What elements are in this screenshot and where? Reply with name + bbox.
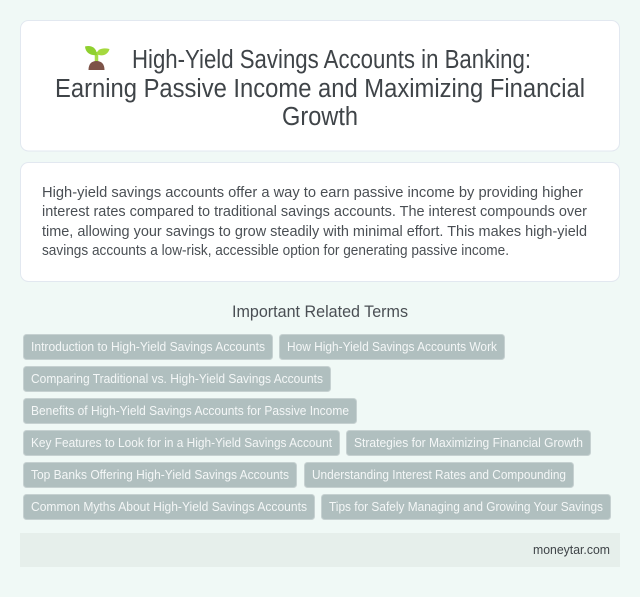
title text: Growth — [282, 103, 358, 131]
tag — [280, 334, 504, 360]
icon: seedling — [85, 46, 110, 70]
panel: title card — [20, 20, 620, 151]
description text: interest rates compared to traditional savings accounts. The interest compounds over — [42, 203, 587, 220]
tag — [24, 334, 272, 360]
panel: term tags — [24, 334, 610, 520]
footer — [20, 533, 620, 567]
tag: Introduction to High-Yield Savings Accounts — [31, 340, 265, 354]
description text: savings accounts a low-risk, accessible option for generating passive income. — [42, 242, 509, 259]
tag — [24, 398, 356, 424]
tag: Tips for Safely Managing and Growing Your Savings — [329, 500, 603, 514]
tag: Understanding Interest Rates and Compounding — [312, 468, 566, 482]
tag — [24, 430, 340, 456]
title text: High-Yield Savings Accounts in Banking: — [132, 46, 531, 74]
tag: Top Banks Offering High-Yield Savings Accounts — [31, 468, 289, 482]
tag: Strategies for Maximizing Financial Growth — [354, 436, 583, 450]
tag — [24, 366, 330, 392]
tag: Benefits of High-Yield Savings Accounts for Passive Income — [31, 404, 349, 418]
tag — [24, 494, 314, 520]
tag — [322, 494, 610, 520]
description text: High-yield savings accounts offer a way to earn passive income by providing higher — [42, 184, 583, 201]
tag — [24, 462, 296, 488]
tag — [346, 430, 590, 456]
panel: description card — [20, 162, 620, 282]
description text — [42, 184, 587, 259]
tag: Common Myths About High-Yield Savings Accounts — [31, 500, 307, 514]
description text: time, allowing your savings to grow steadily with minimal effort. This makes high-yield — [42, 223, 587, 240]
title text: Earning Passive Income and Maximizing Financial — [55, 75, 585, 103]
tag: Key Features to Look for in a High-Yield Savings Account — [31, 436, 332, 450]
tag: How High-Yield Savings Accounts Work — [287, 340, 498, 354]
footer: moneytar.com — [533, 543, 610, 557]
heading: related terms: Important Related Terms — [232, 303, 408, 321]
title text — [55, 46, 585, 131]
tag: Comparing Traditional vs. High-Yield Savings Accounts — [31, 372, 323, 386]
tag — [304, 462, 574, 488]
